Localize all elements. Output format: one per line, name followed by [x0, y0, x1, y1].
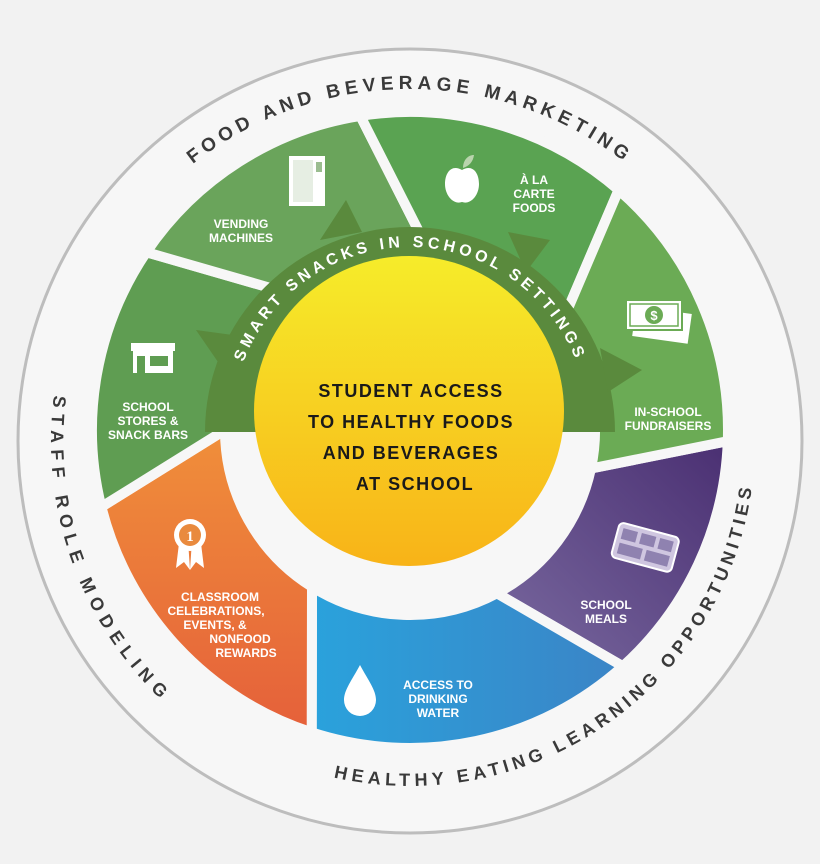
center circle — [254, 256, 564, 566]
icon: lunch tray — [611, 522, 680, 573]
icon: award ribbon: 1 — [186, 529, 194, 545]
segment: a la carte foods — [360, 112, 619, 324]
center circle: AT SCHOOL — [356, 474, 474, 494]
icon: money — [626, 300, 692, 344]
ring label: healthy eating learning opportunities: HEALTHY EATING LEARNING OPPORTUNITIES — [334, 488, 752, 786]
label: classroom celebrations: EVENTS, & — [183, 618, 247, 632]
center circle: STUDENT ACCESS — [318, 381, 504, 401]
label: school stores: SNACK BARS — [108, 428, 188, 442]
icon: apple — [445, 155, 479, 203]
label: a la carte: FOODS — [513, 201, 555, 215]
label: classroom celebrations: NONFOOD — [209, 632, 271, 646]
label: school meals: SCHOOL — [580, 598, 632, 612]
label: access to drinking water: DRINKING — [408, 692, 468, 706]
center circle: TO HEALTHY FOODS — [308, 412, 514, 432]
icon: vending machine — [289, 156, 325, 206]
label: access to drinking water: WATER — [417, 706, 460, 720]
icon: money: $ — [650, 308, 658, 323]
label: fundraisers: FUNDRAISERS — [625, 419, 711, 433]
label: classroom celebrations: REWARDS — [215, 646, 277, 660]
label: access to drinking water: ACCESS TO — [403, 678, 473, 692]
label: vending machines: MACHINES — [209, 231, 273, 245]
segment: classroom celebrations — [101, 430, 312, 732]
segment: drinking water — [312, 587, 623, 748]
icon: store — [131, 343, 175, 373]
ring label: staff role modeling: STAFF ROLE MODELING — [50, 396, 166, 697]
label: school meals: MEALS — [585, 612, 627, 626]
segment: school meals — [497, 441, 728, 666]
segment: vending machines — [146, 116, 426, 293]
segment: in-school fundraisers — [562, 190, 728, 468]
label: classroom celebrations: CLASSROOM — [181, 590, 259, 604]
segment: school stores — [92, 252, 286, 507]
label: fundraisers: IN-SCHOOL — [634, 405, 702, 419]
icon: water drop — [344, 665, 376, 716]
label: a la carte: À LA — [520, 173, 548, 187]
band: smart snacks in school settings — [196, 200, 642, 432]
label: school stores: STORES & — [117, 414, 179, 428]
label: classroom celebrations: CELEBRATIONS, — [167, 604, 265, 618]
band: smart snacks in school settings: SMART SNACKS IN SCHOOL SETTINGS — [234, 236, 584, 361]
label: vending machines: VENDING — [214, 217, 268, 231]
label: school stores: SCHOOL — [122, 400, 174, 414]
icon: award ribbon — [174, 519, 206, 570]
ring label: food and beverage marketing: FOOD AND BEVERAGE MARKETING — [186, 76, 628, 164]
label: a la carte: CARTE — [513, 187, 555, 201]
center circle: AND BEVERAGES — [323, 443, 499, 463]
